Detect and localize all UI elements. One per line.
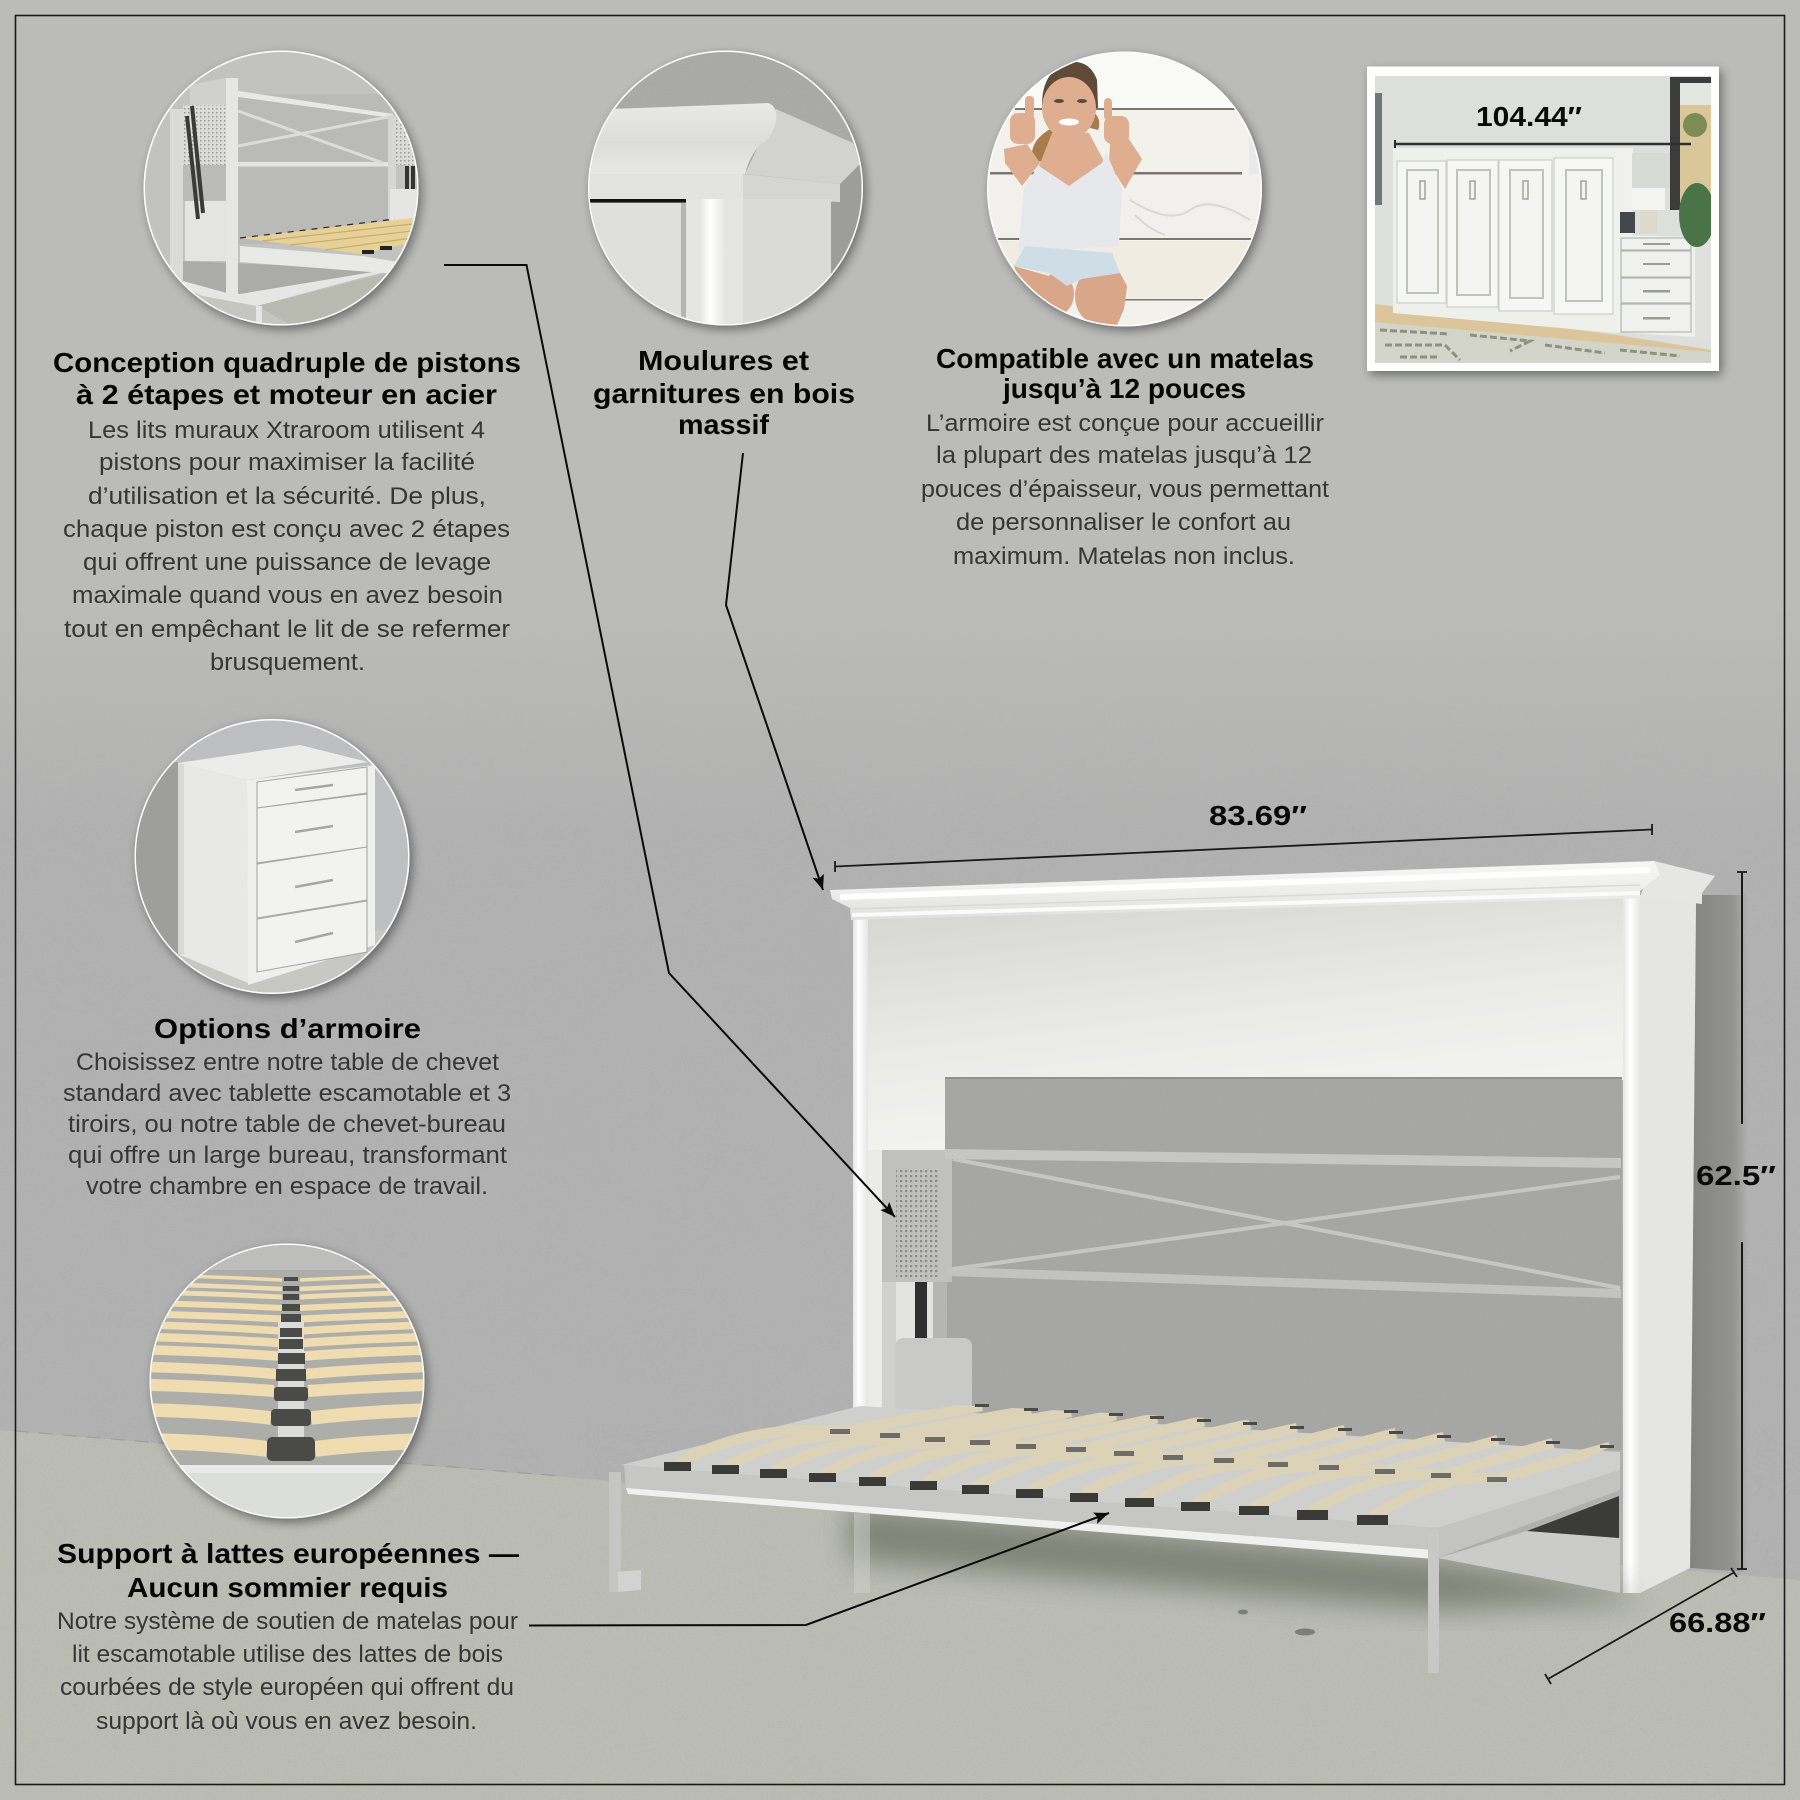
arrow: piston callout	[444, 265, 895, 1217]
body text: piston design: Les lits muraux Xtraroom utilisent 4	[88, 417, 485, 444]
heading: mattress compatibility: jusqu’à 12 pouces	[1002, 373, 1246, 404]
heading: european slats: Aucun sommier requis	[127, 1572, 448, 1603]
dimension: width 83.69: 83.69″	[1209, 800, 1307, 831]
slat end caps	[664, 1404, 1614, 1525]
steel frame with cross braces	[882, 1149, 1621, 1417]
body text: cabinet options: standard avec tablette escamotable et 3	[63, 1080, 511, 1107]
body text: mattress compatibility: pouces d’épaisseur, vous permettant	[921, 476, 1329, 503]
body text: cabinet options: qui offre un large bureau, transformant	[68, 1142, 507, 1169]
body text: piston design: pistons pour maximiser la facilité	[99, 449, 475, 476]
heading: european slats: Support à lattes européennes —	[57, 1538, 519, 1569]
dimension: height 62.5: 62.5″	[1696, 1160, 1776, 1191]
cabinet interior	[868, 895, 1625, 1450]
body text: piston design: qui offrent une puissance de levage	[83, 549, 491, 576]
body text: mattress compatibility: L’armoire est conçue pour accueillir	[926, 410, 1324, 437]
body text: piston design: chaque piston est conçu avec 2 étapes	[63, 516, 510, 543]
body text: mattress compatibility: de personnaliser le confort au	[956, 509, 1291, 536]
circle: crown moulding detail	[585, 48, 867, 334]
hair	[1042, 62, 1098, 108]
text block: mattress compatibility	[921, 343, 1329, 570]
circle: piston mechanism	[140, 48, 422, 330]
shadow and base under the bed	[850, 1496, 1640, 1610]
heading: mouldings: massif	[678, 409, 770, 440]
denim shorts	[1014, 246, 1120, 286]
heading: mattress compatibility: Compatible avec un matelas	[936, 343, 1314, 374]
dimension: depth 66.88	[1545, 1568, 1766, 1684]
dimension: width 83.69	[835, 800, 1652, 872]
circle: european slats	[148, 1242, 428, 1525]
body text: european slats: support là où vous en avez besoin.	[96, 1708, 477, 1735]
body text: european slats	[57, 1608, 518, 1735]
body text: cabinet options	[63, 1049, 511, 1200]
arrow: slats callout	[529, 1513, 1109, 1626]
legs and feet	[1014, 266, 1127, 325]
heading: mouldings: Moulures et	[638, 345, 809, 376]
body text: european slats: courbées de style européen qui offrent du	[60, 1674, 514, 1701]
skin	[1004, 77, 1142, 189]
dimension 104.44: 104.44″	[1476, 101, 1582, 132]
body text: piston design: tout en empêchant le lit de se refermer	[64, 616, 510, 643]
circle: woman with mattress	[985, 50, 1269, 332]
photo: closed cabinet with width dimension	[1367, 66, 1719, 371]
heading: piston design: Conception quadruple de pistons	[53, 347, 521, 378]
dimension: depth 66.88: 66.88″	[1669, 1607, 1766, 1638]
body text: piston design: brusquement.	[210, 649, 365, 676]
body text: cabinet options: tiroirs, ou notre table de chevet-bureau	[68, 1111, 506, 1138]
body text: european slats: lit escamotable utilise des lattes de bois	[72, 1641, 503, 1668]
bed platform	[621, 1406, 1620, 1559]
crown moulding	[830, 861, 1715, 920]
product: wall bed with open cabinet	[609, 861, 1748, 1673]
bed legs	[609, 1472, 1439, 1673]
heading: european slats	[57, 1538, 519, 1603]
body text: piston design: d’utilisation et la sécurité. De plus,	[88, 483, 486, 510]
left post	[853, 915, 868, 1430]
heading: piston design: à 2 étapes et moteur en acier	[76, 379, 497, 410]
heading: mouldings: garnitures en bois	[593, 378, 855, 409]
body text: european slats: Notre système de soutien de matelas pour	[57, 1608, 518, 1635]
white tank top	[1018, 152, 1122, 252]
body text: mattress compatibility: maximum. Matelas non inclus.	[953, 543, 1295, 570]
text block: piston design	[53, 347, 521, 676]
heading: piston design	[53, 347, 521, 410]
face features	[1054, 99, 1087, 126]
arrow: moulding callout	[726, 453, 823, 890]
body text: cabinet options: Choisissez entre notre table de chevet	[76, 1049, 499, 1076]
heading: mattress compatibility	[936, 343, 1314, 404]
body text: mattress compatibility: la plupart des matelas jusqu’à 12	[936, 442, 1312, 469]
body text: mattress compatibility	[921, 410, 1329, 570]
text block: cabinet options	[63, 1013, 511, 1200]
body text: piston design: maximale quand vous en avez besoin	[72, 582, 503, 609]
circle: nightstand options	[132, 717, 416, 1002]
text block: european slats	[57, 1538, 519, 1735]
body text: cabinet options: votre chambre en espace de travail.	[86, 1173, 488, 1200]
body text: piston design	[63, 417, 510, 676]
heading: mouldings	[593, 345, 855, 440]
wooden slats	[677, 1406, 1610, 1517]
gas piston	[915, 1282, 927, 1340]
heading: cabinet options: Options d’armoire	[154, 1013, 421, 1044]
right post and side panel	[1623, 895, 1696, 1593]
